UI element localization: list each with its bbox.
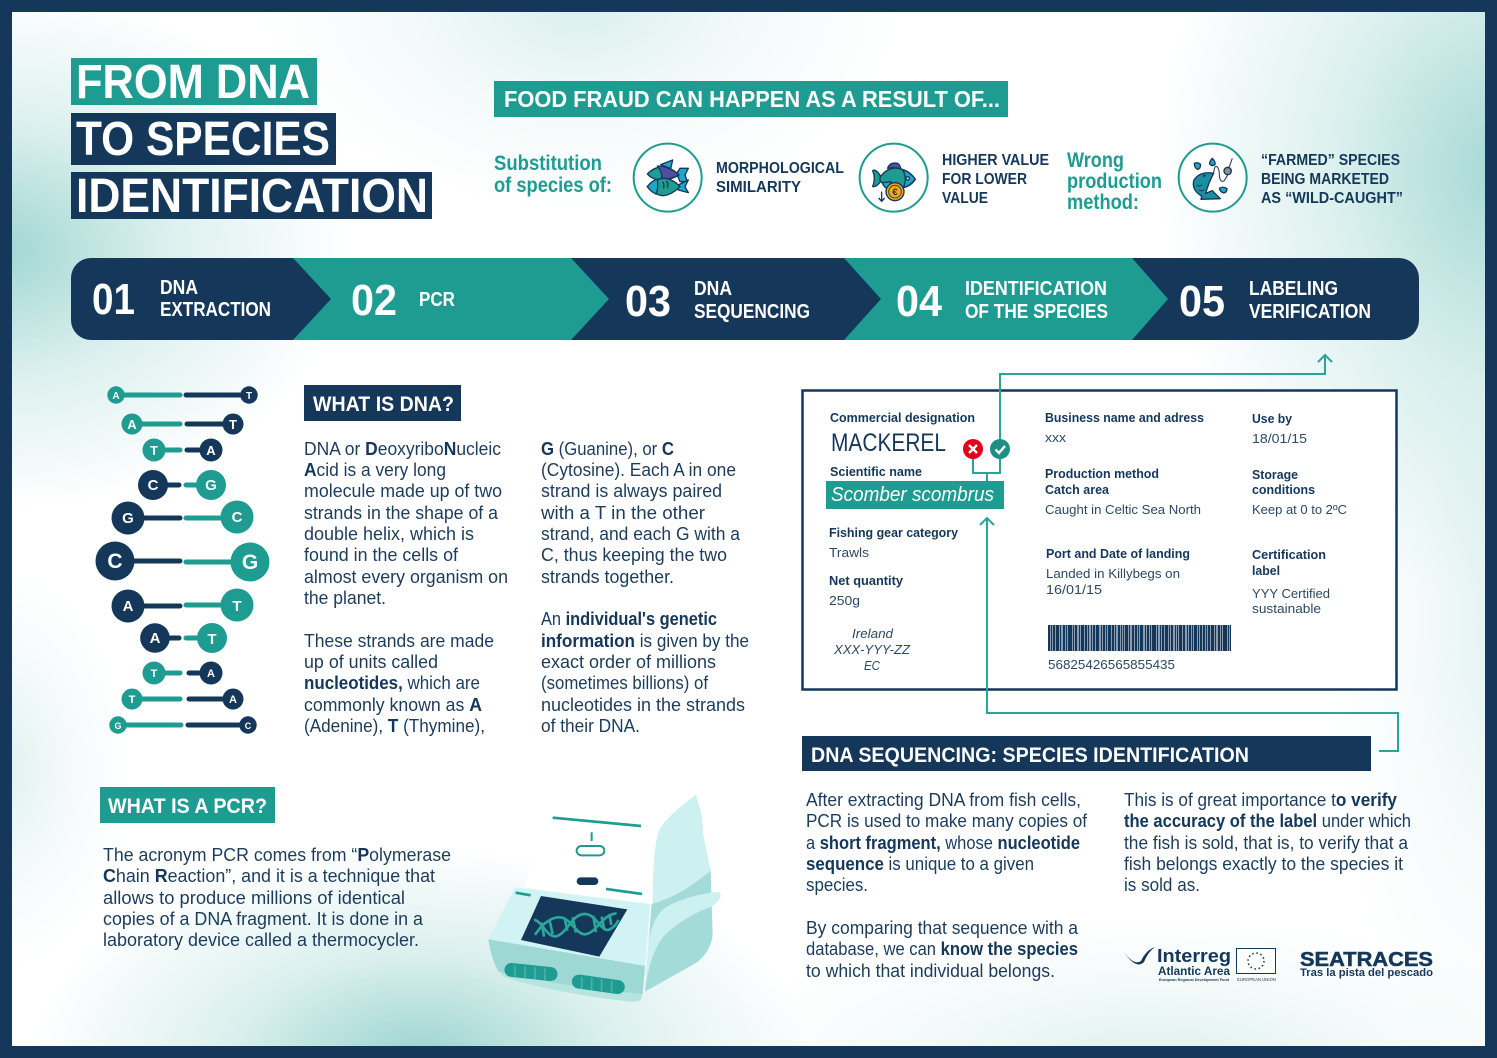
icon: wrong mark [963, 439, 983, 459]
label: gear and quantity [829, 525, 959, 608]
title [71, 56, 432, 223]
text: higher value for lower value: HIGHER VALUE [942, 152, 1049, 169]
text: sequencing column 2 [1124, 790, 1411, 895]
DNA strand diagram: C [245, 721, 252, 731]
label: scientific name box: Scomber scombrus [831, 484, 994, 506]
label: dates and certification: Use by [1252, 411, 1293, 426]
substitution label: Substitution [494, 152, 602, 175]
DNA strand diagram: T [151, 668, 158, 680]
text: what is DNA column 1: double helix, which is [304, 524, 474, 544]
text: what is DNA column 2: exact order of millions [541, 652, 716, 672]
DNA strand diagram: G [122, 510, 134, 527]
step 04: 04 [896, 277, 942, 326]
label: business and production: Business name and adress [1045, 410, 1204, 425]
text: what is DNA column 2: (Cytosine). Each A in one [541, 460, 736, 480]
step 01: EXTRACTION [160, 299, 271, 321]
food fraud heading: FOOD FRAUD CAN HAPPEN AS A RESULT OF... [504, 86, 1000, 112]
DNA strand diagram: C [107, 550, 123, 573]
label: commercial designation: MACKEREL [831, 429, 946, 457]
label: gear and quantity: Net quantity [829, 573, 904, 588]
process chevron bar [71, 258, 1419, 340]
text: what is DNA column 1: nucleotides, which are [304, 673, 480, 693]
icon: fish with euro [860, 144, 928, 212]
icon: correct mark [990, 439, 1010, 459]
step 05: VERIFICATION [1249, 301, 1371, 323]
DNA strand diagram: T [229, 417, 237, 432]
text: what is DNA column 1: (Adenine), T (Thymine), [304, 716, 485, 736]
text: what is DNA column 2: strand, and each G with a [541, 524, 741, 544]
label: commercial designation [830, 410, 975, 479]
wrong production label: production [1067, 170, 1162, 193]
text: sequencing column 2: is sold as. [1124, 875, 1200, 895]
label: dates and certification: Storage [1252, 467, 1298, 482]
text: what is DNA column 1: found in the cells of [304, 545, 459, 565]
text: what is DNA column 1: up of units called [304, 652, 438, 672]
DNA strand diagram: G [205, 477, 217, 494]
text: what is DNA column 2: nucleotides in the strands [541, 695, 745, 715]
text: sequencing column 2: the fish is sold, that is, to verify that a [1124, 833, 1409, 853]
logo: Interreg Atlantic Area: European Regional Development Fund [1159, 977, 1230, 982]
label: dates and certification: label [1252, 563, 1280, 578]
step 03: 03 [625, 277, 671, 326]
label: business and production [1045, 410, 1204, 597]
DNA strand diagram: A [207, 668, 215, 680]
text: what is a PCR: Chain Reaction”, and it is a technique that [103, 866, 435, 886]
DNA strand diagram: A [127, 417, 137, 432]
text: farmed species [1261, 152, 1403, 207]
step 03: SEQUENCING [694, 301, 810, 323]
step 04 [896, 277, 1108, 326]
step 01 [92, 275, 271, 324]
text: what is DNA column 2: (sometimes billions) of [541, 673, 709, 693]
label: gear and quantity: Fishing gear category [829, 525, 959, 540]
text: what is DNA column 1: almost every organism on [304, 567, 508, 587]
step 05 [1179, 277, 1371, 326]
barcode: 56825426565855435 [1048, 657, 1175, 672]
substitution label [494, 152, 612, 197]
text: sequencing column 1: After extracting DNA from fish cells, [806, 790, 1081, 810]
text: sequencing column 1: species. [806, 875, 868, 895]
text: higher value for lower value: FOR LOWER [942, 171, 1027, 188]
label: origin stamp [833, 626, 911, 673]
text: what is a PCR: laboratory device called a thermocycler. [103, 930, 419, 950]
step 03: DNA [694, 278, 732, 300]
text: sequencing column 1: to which that individual belongs. [806, 961, 1055, 981]
logo: Interreg Atlantic Area: Atlantic Area [1158, 964, 1230, 978]
text: what is DNA column 2: of their DNA. [541, 716, 640, 736]
text: what is a PCR: allows to produce millions of identical [103, 888, 405, 908]
text: what is DNA column 2: strand is always paired [541, 481, 722, 501]
step 02: 02 [351, 276, 397, 325]
text: what is DNA column 2: C, thus keeping the two [541, 545, 727, 565]
text: what is a PCR: The acronym PCR comes from “Polymerase [103, 845, 451, 865]
arrow: label verification connector [973, 355, 1332, 481]
heading: what is a PCR: WHAT IS A PCR? [108, 795, 267, 818]
wrong production label: method: [1067, 191, 1139, 214]
label: origin stamp: Ireland [852, 626, 894, 641]
label: dates and certification: Certification [1252, 547, 1326, 562]
step 02: PCR [419, 289, 455, 311]
DNA strand diagram: T [150, 443, 158, 458]
text: what is DNA column 2: strands together. [541, 567, 674, 587]
text: what is DNA column 1: molecule made up of two [304, 481, 502, 501]
arrow: sequencing to scientific name [980, 518, 1398, 751]
food label card [802, 390, 1396, 690]
DNA strand diagram: G [242, 551, 258, 574]
text: sequencing column 1 [806, 790, 1088, 981]
text: what is DNA column 1: DNA or DeoxyriboNucleic [304, 439, 501, 459]
text: what is DNA column 2 [540, 439, 749, 736]
step 05: 05 [1179, 277, 1225, 326]
title: FROM DNA [76, 56, 310, 109]
text: farmed species: “FARMED” SPECIES [1261, 152, 1400, 169]
label: commercial designation: Commercial designation [830, 410, 975, 425]
label: dates and certification: 18/01/15 [1252, 431, 1307, 446]
text: what is DNA column 2: G (Guanine), or C [541, 439, 674, 459]
text: higher value for lower value: VALUE [942, 190, 988, 207]
barcode [1048, 625, 1231, 672]
text: morphological similarity [716, 160, 844, 196]
DNA strand diagram: C [232, 509, 243, 526]
text: morphological similarity: SIMILARITY [716, 179, 802, 196]
label: business and production: xxx [1045, 430, 1067, 445]
logo: Interreg Atlantic Area: Interreg [1157, 946, 1231, 966]
label: gear and quantity: Trawls [829, 545, 870, 560]
text: what is a PCR: copies of a DNA fragment. It is done in a [103, 909, 424, 929]
step 04: IDENTIFICATION [965, 278, 1107, 300]
DNA strand diagram [96, 386, 270, 734]
text: what is DNA column 1: Acid is a very long [304, 460, 446, 480]
text: sequencing column 2: fish belongs exactly to the species it [1124, 854, 1403, 874]
text: what is DNA column 2: An individual's genetic [541, 609, 717, 629]
text: sequencing column 1: database, we can know the species [806, 939, 1078, 959]
DNA strand diagram: T [232, 598, 242, 615]
DNA strand diagram: T [246, 391, 252, 402]
text: farmed species: AS “WILD-CAUGHT” [1261, 190, 1403, 207]
label: business and production: Production method [1045, 466, 1159, 481]
heading: DNA sequencing [802, 736, 1371, 771]
label: origin stamp: XXX-YYY-ZZ [833, 642, 911, 657]
text: sequencing column 2: This is of great importance to verify [1124, 790, 1397, 810]
substitution label: of species of: [494, 174, 612, 197]
DNA strand diagram: T [207, 631, 217, 648]
step 02 [351, 276, 455, 325]
label: dates and certification [1252, 411, 1347, 616]
text: farmed species: BEING MARKETED [1261, 171, 1389, 188]
food fraud heading [494, 81, 1008, 117]
text: what is DNA column 1: the planet. [304, 588, 386, 608]
logo: Seatraces [1300, 949, 1433, 979]
DNA strand diagram: A [123, 598, 134, 615]
logo: Interreg Atlantic Area [1124, 946, 1276, 982]
heading: DNA sequencing: DNA SEQUENCING: SPECIES IDENTIFICATION [811, 744, 1249, 767]
label: dates and certification: sustainable [1252, 601, 1321, 616]
DNA strand diagram: A [206, 443, 216, 458]
DNA strand diagram: A [112, 391, 120, 402]
text: sequencing column 1: PCR is used to make many copies of [806, 811, 1088, 831]
label: gear and quantity: 250g [829, 593, 860, 608]
step 05: LABELING [1249, 278, 1338, 300]
label: business and production: Caught in Celtic Sea North [1045, 502, 1201, 517]
title: TO SPECIES [76, 113, 330, 166]
heading: what is DNA [304, 385, 461, 421]
logo: Seatraces: Tras la pista del pescado [1300, 967, 1433, 979]
DNA strand diagram: A [150, 630, 161, 647]
DNA strand diagram: G [114, 721, 122, 731]
step 01: 01 [92, 275, 135, 324]
DNA strand diagram: C [148, 477, 159, 494]
text: sequencing column 1: sequence is unique to a given [806, 854, 1034, 874]
label: dates and certification: conditions [1252, 482, 1315, 497]
thermocycler illustration [488, 795, 721, 1002]
text: what is DNA column 1: strands in the shape of a [304, 503, 499, 523]
wrong production label [1067, 149, 1162, 214]
text: what is DNA column 2: information is given by the [541, 631, 749, 651]
text: sequencing column 1: By comparing that sequence with a [806, 918, 1079, 938]
text: what is DNA column 1 [304, 439, 508, 736]
label: business and production: Port and Date of landing [1046, 546, 1190, 561]
step 03 [625, 277, 810, 326]
text: what is DNA column 2: with a T in the other [540, 503, 705, 523]
logo: Interreg Atlantic Area: EUROPEAN UNION [1237, 977, 1276, 982]
text: sequencing column 1: a short fragment, whose nucleotide [806, 833, 1080, 853]
text: what is DNA column 1: commonly known as A [304, 695, 482, 715]
heading: what is DNA: WHAT IS DNA? [313, 393, 454, 416]
text: what is DNA column 1: These strands are made [304, 631, 494, 651]
step 01: DNA [160, 277, 198, 299]
icon: fish with euro: € [892, 187, 898, 197]
label: business and production: Catch area [1045, 482, 1110, 497]
title: IDENTIFICATION [76, 170, 428, 223]
icon: two fish [634, 144, 702, 212]
label: business and production: 16/01/15 [1046, 582, 1102, 597]
icon: hooked fish [1179, 144, 1247, 212]
DNA strand diagram: A [229, 694, 237, 706]
text: what is a PCR [103, 845, 451, 950]
text: higher value for lower value [942, 152, 1049, 207]
label: commercial designation: Scientific name [830, 464, 922, 479]
logo: Seatraces: SEATRACES [1300, 949, 1433, 971]
step 04: OF THE SPECIES [965, 301, 1108, 323]
label: dates and certification: YYY Certified [1252, 586, 1330, 601]
label: dates and certification: Keep at 0 to 2ºC [1252, 502, 1347, 517]
DNA strand diagram: T [129, 694, 136, 706]
label: business and production: Landed in Killybegs on [1046, 566, 1180, 581]
text: sequencing column 2: the accuracy of the label under which [1124, 811, 1411, 831]
label: origin stamp: EC [864, 658, 881, 673]
wrong production label: Wrong [1067, 149, 1124, 172]
text: morphological similarity: MORPHOLOGICAL [716, 160, 844, 177]
heading: what is a PCR [100, 787, 275, 823]
